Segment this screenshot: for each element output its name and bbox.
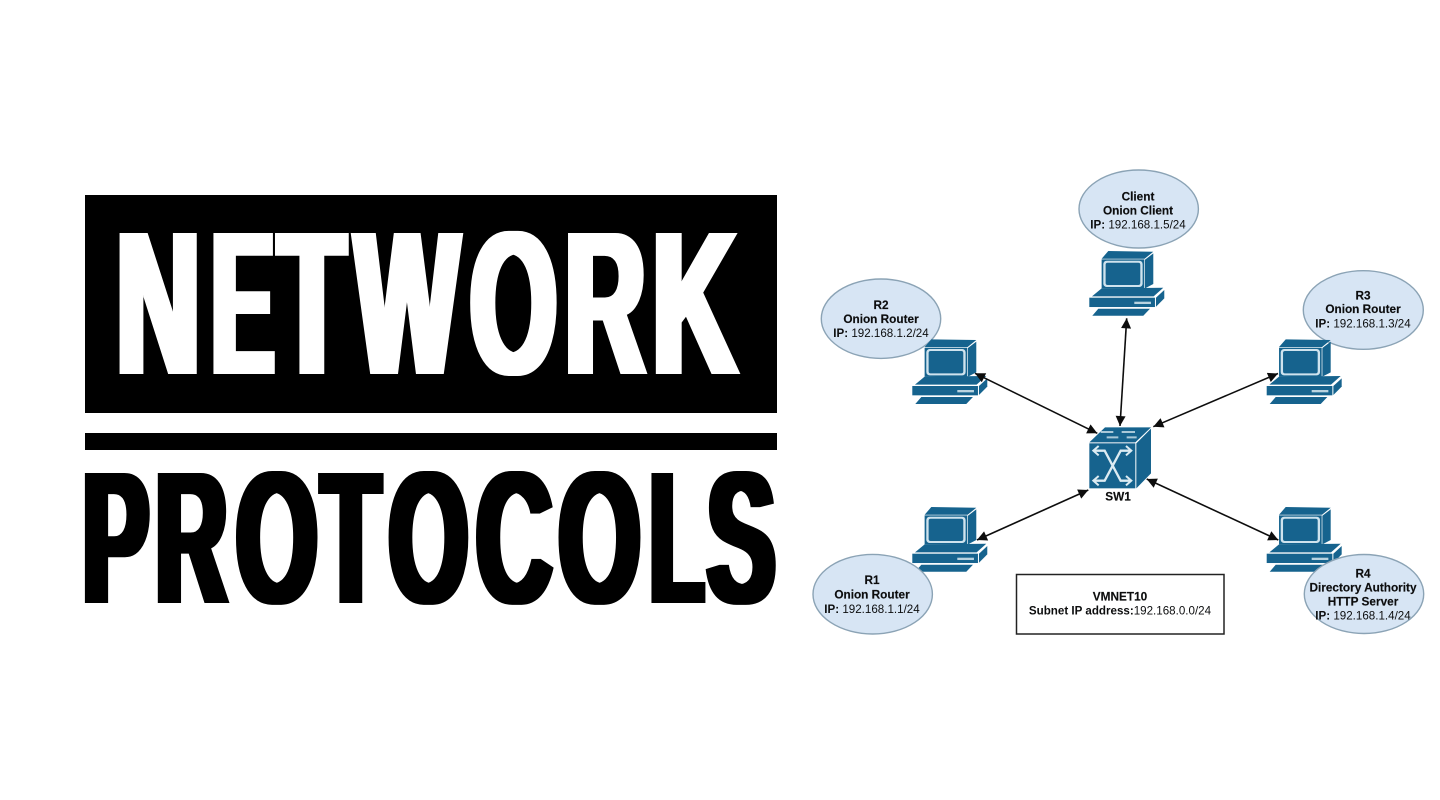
divider bar (85, 433, 777, 450)
node: R2: IP: 192.168.1.2/24 (833, 327, 929, 340)
node: R2 (821, 279, 987, 404)
node: R4: HTTP Server (1328, 594, 1399, 608)
heading: PROTOCOLS: R (156, 431, 227, 643)
icon: switch SW1 (1089, 427, 1151, 488)
node: R1: R1 (864, 573, 880, 587)
node: R1 (813, 507, 987, 634)
node: R4: Directory Authority (1309, 580, 1417, 594)
legend box: VMNET10 subnet: VMNET10 (1093, 590, 1148, 604)
legend box: VMNET10 subnet (1016, 574, 1224, 634)
heading: NETWORK: R (565, 189, 645, 418)
heading: PROTOCOLS: O (389, 434, 468, 644)
node: R3: IP: 192.168.1.3/24 (1315, 318, 1411, 330)
node: Client: Client (1122, 190, 1154, 204)
heading: PROTOCOLS: O (559, 434, 640, 644)
node: Client: IP: 192.168.1.5/24 (1090, 218, 1186, 232)
heading: PROTOCOLS: O (236, 433, 317, 644)
arrow: R1 to switch (977, 490, 1088, 540)
heading: NETWORK: W (355, 188, 459, 418)
heading: NETWORK: N (116, 189, 200, 418)
arrow: R2 to switch (975, 373, 1097, 433)
heading: PROTOCOLS: T (322, 432, 380, 643)
heading: PROTOCOLS: S (707, 434, 775, 644)
heading: NETWORK (116, 188, 737, 418)
heading: PROTOCOLS: L (650, 434, 704, 644)
arrow: Client to switch (1120, 318, 1127, 426)
heading: PROTOCOLS (83, 431, 775, 644)
heading: NETWORK: K (652, 190, 737, 418)
node: Client (1079, 170, 1198, 316)
node: R3: R3 (1355, 288, 1371, 302)
node: Client: Onion Client (1103, 204, 1173, 218)
heading: NETWORK: E (212, 189, 274, 418)
heading: NETWORK: O (470, 189, 557, 417)
node: R3 (1267, 271, 1423, 404)
legend box: VMNET10 subnet: Subnet IP address:192.168.0.0/24 (1029, 604, 1212, 618)
arrow: R3 to switch (1153, 374, 1278, 427)
node: R4 (1267, 507, 1424, 634)
node: R3: Onion Router (1325, 302, 1401, 316)
heading: PROTOCOLS: P (83, 433, 149, 643)
heading: NETWORK: T (278, 188, 345, 418)
arrow: R4 to switch (1147, 479, 1278, 540)
node: R2: R2 (873, 298, 889, 312)
node: R4: IP: 192.168.1.4/24 (1315, 610, 1411, 622)
node: R1: Onion Router (834, 588, 910, 602)
node: R1: IP: 192.168.1.1/24 (824, 603, 920, 616)
title panel: black banner (85, 195, 777, 413)
network diagram (813, 170, 1424, 634)
heading: PROTOCOLS: C (476, 434, 552, 644)
label: SW1: SW1 (1105, 490, 1131, 504)
node: R2: Onion Router (843, 312, 919, 326)
node: R4: R4 (1355, 566, 1371, 580)
